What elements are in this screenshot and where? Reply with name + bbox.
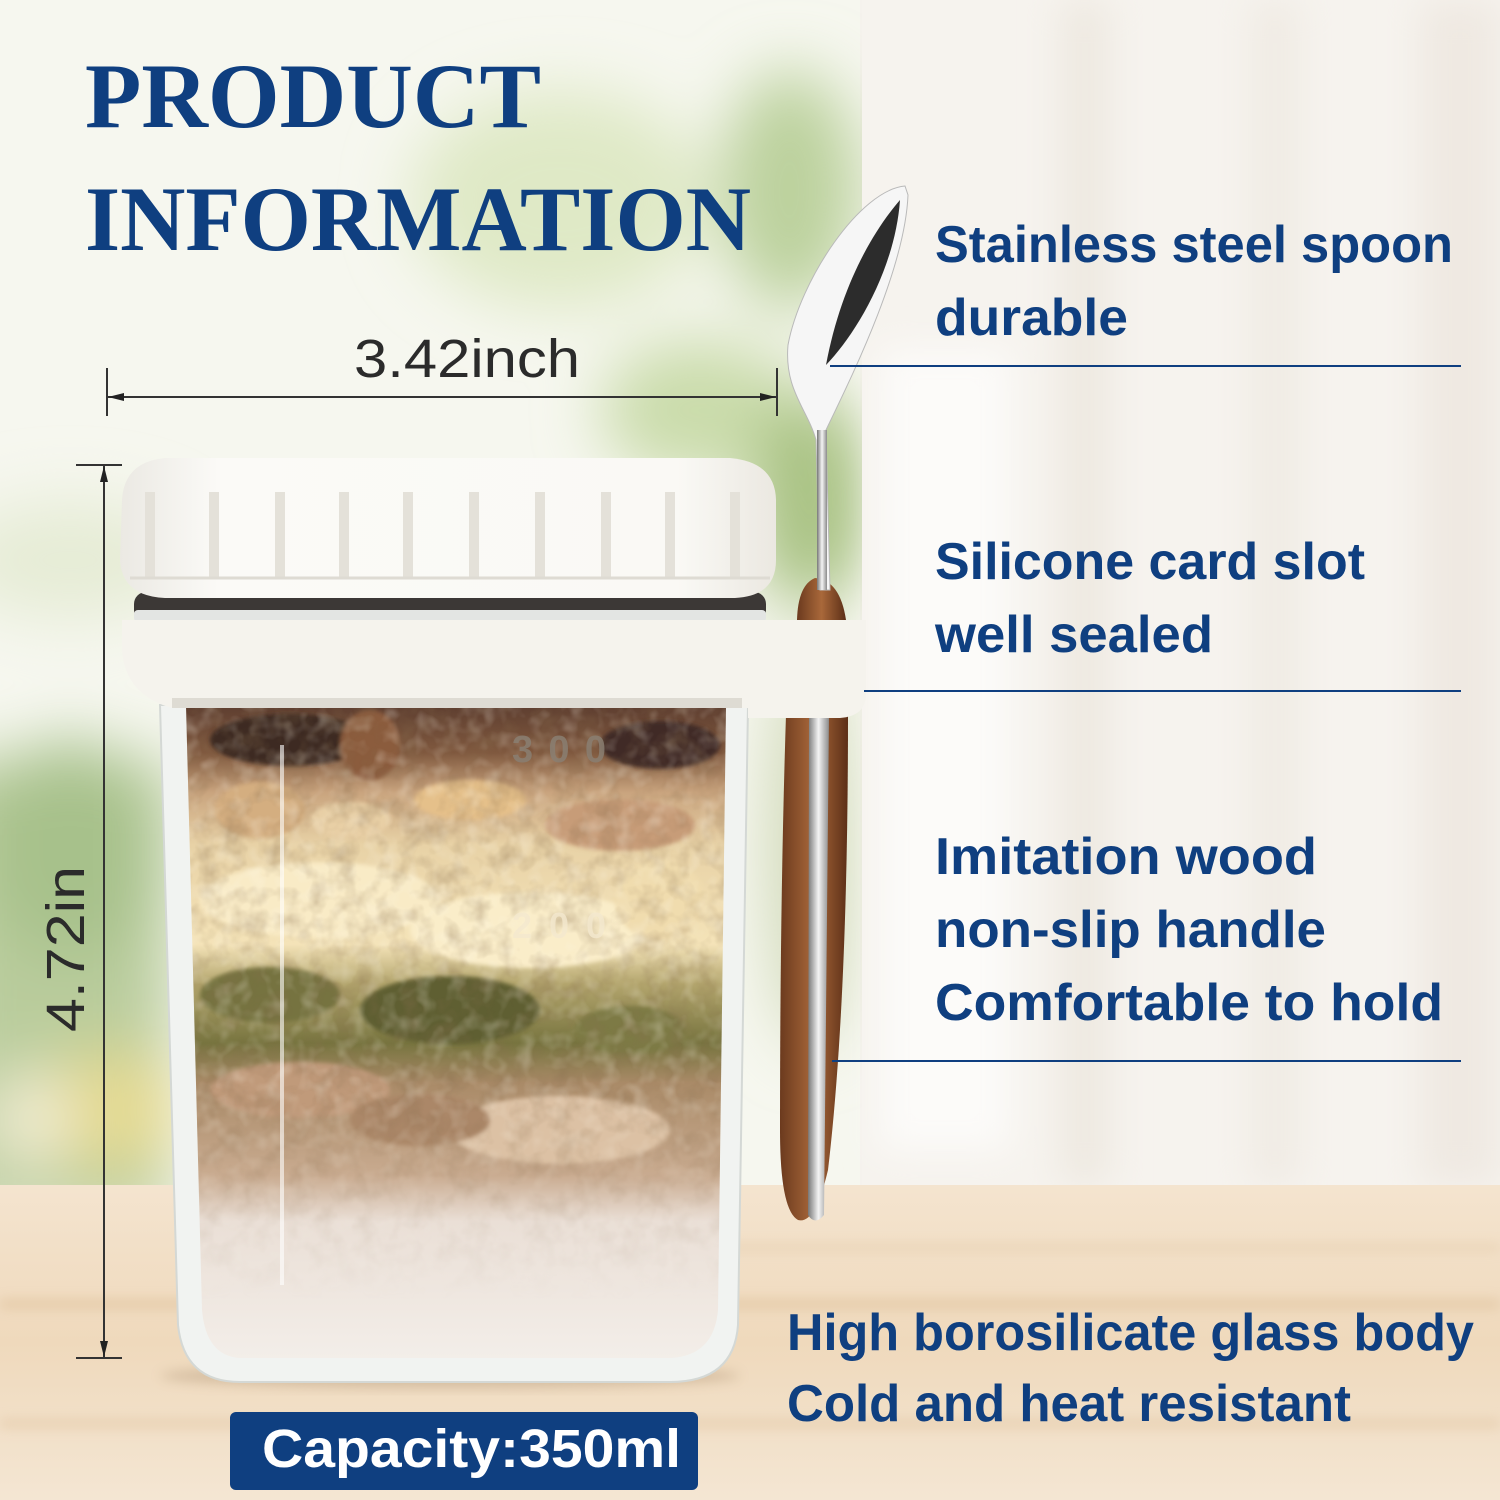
dimension: height: 4.72in [36,866,96,1032]
food contents [180,700,730,1360]
jar: 200 [512,905,606,946]
title: INFORMATION [85,168,751,270]
glass rim [134,592,766,622]
callout: handle: Imitation wood [935,828,1317,886]
silicone collar with spoon slot [122,620,866,718]
callout: handle [832,828,1461,1062]
title [85,45,751,270]
callout: spoon [830,216,1461,367]
measuring marks: 300 [512,729,606,771]
spoon [780,186,908,1220]
callout: handle: Comfortable to hold [935,974,1443,1032]
callout: silicone [864,533,1461,692]
lid [120,458,776,598]
dimension: width [107,329,777,416]
callout: glass: Cold and heat resistant [787,1375,1351,1433]
title: PRODUCT [85,45,541,147]
dimension: width: 3.42inch [354,329,580,389]
jar [120,186,908,1388]
jar shadow [160,1364,740,1388]
glass body [160,705,748,1382]
capacity badge [230,1412,698,1490]
wooden handle [780,715,848,1220]
callout: spoon: Stainless steel spoon [935,216,1453,274]
callout: glass: High borosilicate glass body [787,1304,1474,1362]
callout: silicone: well sealed [934,606,1213,664]
callout: glass [787,1304,1474,1433]
wooden handle top [797,578,846,620]
dimension: height [36,465,122,1358]
callout: spoon: durable [935,289,1128,347]
callout: silicone: Silicone card slot [935,533,1365,591]
callout: handle: non-slip handle [935,901,1326,959]
capacity badge: Capacity:350ml [262,1419,681,1479]
